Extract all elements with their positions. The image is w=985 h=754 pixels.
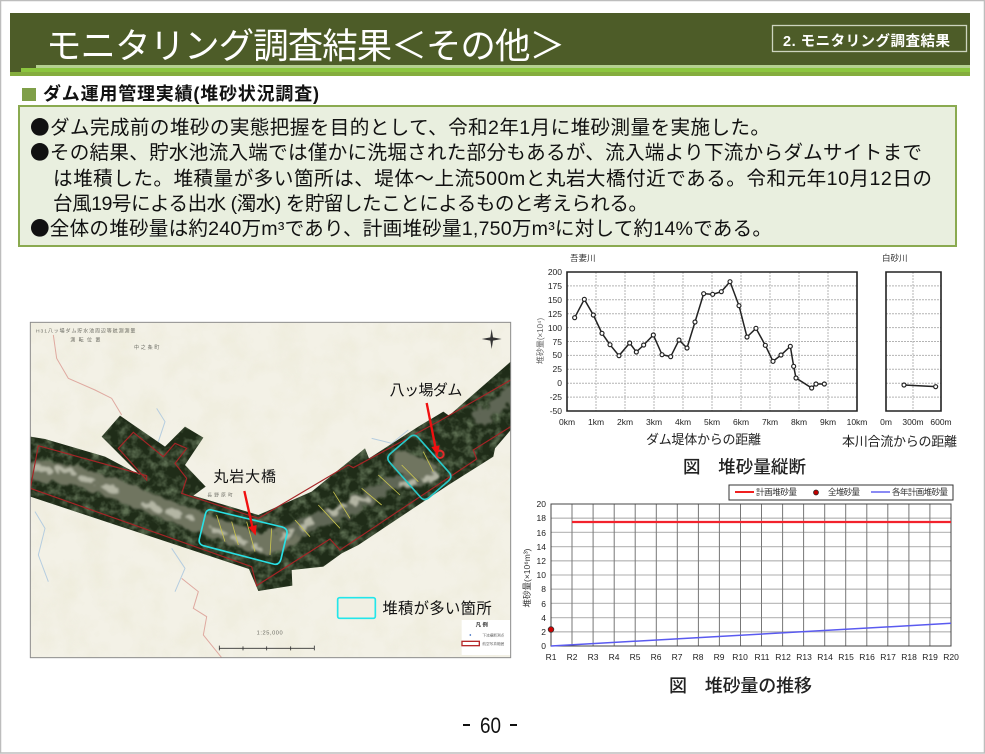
x axis labels: 8km: [791, 417, 807, 427]
x axis labels: 300m: [902, 417, 924, 427]
arrow: to Maruiwa bridge: [244, 491, 257, 536]
map legend box: 航空写真範囲: [482, 641, 505, 646]
valley bare ground: [32, 395, 511, 548]
map panel: [30, 322, 511, 658]
data series: Agatsuma: [573, 280, 826, 390]
y axis labels: 175: [548, 281, 562, 291]
y axis title: 堆砂量(×10⁶m³): [522, 548, 532, 608]
title: モニタリング調査結果＜その他＞: [46, 26, 565, 66]
x axis labels: 3km: [646, 417, 662, 427]
data series: Shirasuna: [902, 383, 938, 389]
bullet text 2: [30, 136, 932, 215]
y axis labels: 16: [537, 528, 546, 538]
y axis labels: 25: [553, 364, 562, 374]
y axis labels: 4: [541, 613, 546, 623]
x axis labels: R6: [651, 652, 662, 662]
plot frame: [551, 504, 951, 646]
section tag: [772, 26, 966, 52]
summary text panel: [19, 106, 956, 246]
y axis labels: 18: [537, 513, 546, 523]
label: Maruiwa bridge: 丸岩大橋: [213, 469, 276, 486]
y axis title: 堆砂量(×10⁴): [535, 318, 545, 364]
x axis labels: 7km: [762, 417, 778, 427]
y axis labels: 10: [537, 570, 546, 580]
y axis labels: 75: [553, 337, 562, 347]
x axis labels: R4: [609, 652, 620, 662]
x axis labels: R11: [755, 652, 770, 662]
scale bar: [219, 646, 314, 650]
river label: Agatsuma: 吾妻川: [570, 253, 596, 263]
map caption: 測 転 位 置: [70, 336, 100, 343]
x axis labels: 5km: [704, 417, 720, 427]
roads and rivers: [35, 335, 408, 658]
y axis labels: 0: [541, 641, 546, 651]
survey cross section lines: [217, 452, 433, 555]
horizontal gridlines: [551, 518, 951, 632]
annual planned sediment line: [551, 623, 951, 646]
y axis labels: -25: [550, 392, 562, 402]
chart legend: 全堆砂量: [828, 487, 860, 497]
legend: heavy sedimentation: 堆積が多い箇所: [382, 599, 492, 617]
x axis labels: [559, 417, 952, 427]
vertical gridlines: [572, 504, 930, 646]
map frame: [30, 322, 511, 658]
plot frames: [567, 272, 941, 411]
x axis labels: R12: [775, 652, 791, 662]
label: Yamba dam: 八ッ場ダム: [390, 382, 462, 399]
y axis labels: 150: [548, 295, 562, 305]
chart legend: [729, 485, 953, 500]
x axis labels: R13: [796, 652, 812, 662]
aerial photo band: [30, 362, 511, 591]
bullet text 1: ●ダム完成前の堆砂の実態把握を目的として、令和2年1月に堆砂測量を実施した。: [30, 111, 770, 140]
map caption: H31八ッ場ダム貯水池周辺等航測測量: [36, 327, 135, 334]
x axis title: distance from dam: ダム堤体からの距離: [646, 432, 761, 447]
y axis labels: 0: [557, 378, 562, 388]
x axis labels: R19: [922, 652, 938, 662]
x axis labels: 9km: [820, 417, 836, 427]
y axis labels: 125: [548, 309, 562, 319]
y axis labels: 8: [541, 584, 546, 594]
chart legend: 各年計画堆砂量: [892, 487, 948, 497]
x axis labels: R2: [567, 652, 578, 662]
section heading: ダム運用管理実績(堆砂状況調査): [43, 83, 319, 104]
total sediment point: [548, 627, 554, 632]
map legend box: 凡 例: [476, 621, 488, 629]
cyan area marker: Maruiwa bridge: [199, 510, 287, 564]
red survey boundary: [30, 380, 511, 586]
cyan area marker: Yamba dam: [388, 435, 451, 500]
x axis labels: R16: [859, 652, 875, 662]
x axis labels: R8: [693, 652, 704, 662]
chart: longitudinal sediment profile: [535, 253, 957, 477]
x axis labels: R15: [838, 652, 854, 662]
section tag: 2. モニタリング調査結果: [783, 32, 950, 50]
y axis labels: 50: [553, 350, 562, 360]
map legend box: [462, 620, 511, 655]
y axis labels: [548, 267, 562, 416]
y axis labels: [537, 499, 546, 651]
y axis labels: 12: [537, 556, 546, 566]
x axis labels: R20: [943, 652, 959, 662]
bullet text 2: は堆積した。堆積量が多い箇所は、堤体～上流500mと丸岩大橋付近である。令和元年10月12日の: [53, 168, 932, 190]
bullet text 2: 台風19号による出水 (濁水) を貯留したことによるものと考えられる。: [53, 193, 648, 215]
x axis title: distance from confluence: 本川合流からの距離: [842, 434, 957, 449]
x axis labels: 10km: [847, 417, 867, 427]
x axis labels: R14: [817, 652, 833, 662]
x axis labels: R5: [630, 652, 641, 662]
page number: 60: [480, 713, 501, 738]
map legend box: 下流横断測点: [482, 633, 505, 638]
dam site marker: [436, 451, 444, 458]
x axis labels: R7: [672, 652, 683, 662]
x axis labels: R3: [588, 652, 599, 662]
map caption: 1:25,000: [257, 631, 283, 637]
x axis labels: [546, 652, 959, 662]
x axis labels: 2km: [617, 417, 633, 427]
x axis labels: R18: [901, 652, 917, 662]
page number: [463, 713, 517, 738]
x axis labels: R17: [880, 652, 896, 662]
x axis labels: 6km: [733, 417, 749, 427]
planned sediment line: [572, 521, 951, 523]
x axis labels: R10: [732, 652, 748, 662]
x axis labels: 0km: [559, 417, 575, 427]
x axis labels: 4km: [675, 417, 691, 427]
x axis labels: R1: [546, 652, 557, 662]
chart caption: 図 堆砂量の推移: [669, 676, 812, 696]
x axis labels: R9: [714, 652, 725, 662]
y axis labels: 6: [541, 599, 546, 609]
gridlines: [567, 272, 941, 411]
map caption: 長野原町: [207, 492, 233, 499]
y axis labels: -50: [550, 406, 562, 416]
icon: north compass: [482, 329, 502, 349]
title banner: [10, 13, 970, 76]
y axis labels: 14: [537, 542, 546, 552]
river label: Shirasuna: 白砂川: [882, 253, 908, 263]
x axis labels: 0m: [880, 417, 892, 427]
y axis labels: 200: [548, 267, 562, 277]
chart caption: 図 堆砂量縦断: [683, 457, 806, 477]
bullet text 3: ●全体の堆砂量は約240万m³であり、計画堆砂量1,750万m³に対して約14%である。: [30, 212, 772, 241]
x axis labels: 1km: [588, 417, 604, 427]
chart: sediment volume trend: [522, 485, 959, 696]
y axis labels: 100: [548, 323, 562, 333]
legend: heavy sedimentation: [338, 598, 492, 618]
y axis labels: 20: [537, 499, 546, 509]
map caption: 中之条町: [134, 344, 159, 351]
arrow: to Yamba dam: [427, 403, 440, 456]
bullet text 2: ●その結果、貯水池流入端では僅かに洗堀された部分もあるが、流入端より下流からダムサイトまで: [30, 136, 922, 165]
chart legend: 計画堆砂量: [756, 487, 797, 497]
y axis labels: 2: [541, 627, 546, 637]
x axis labels: 600m: [930, 417, 952, 427]
map caption: [36, 327, 283, 637]
